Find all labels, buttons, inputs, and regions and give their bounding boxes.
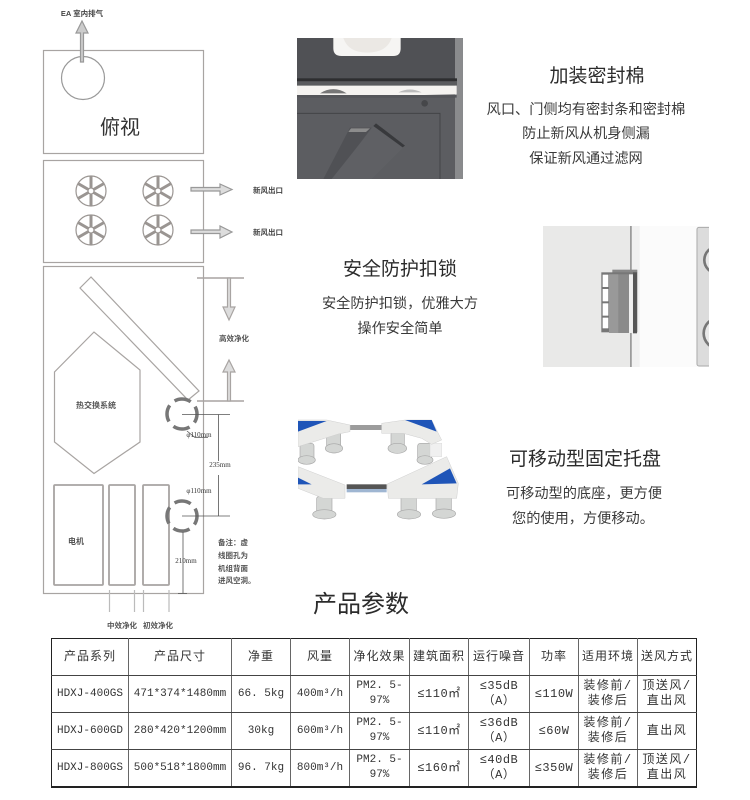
- table: product parameters: 400m³/h: [297, 688, 343, 700]
- note: 备注：虚: [218, 537, 248, 547]
- table: product parameters: HDXJ-400GS: [57, 688, 123, 700]
- text: sealing cotton description: [487, 102, 685, 167]
- label: 210mm: 210mm: [175, 557, 197, 565]
- table: product parameters: 280*420*1200mm: [134, 724, 226, 736]
- table: product parameters: 功率: [541, 650, 567, 664]
- note: 进风空洞。: [218, 575, 256, 585]
- icon: fan top right: [143, 176, 173, 206]
- table: product parameters: HDXJ-600GD: [57, 724, 123, 736]
- feet: [298, 432, 456, 519]
- table: product parameters: 97%: [370, 732, 389, 744]
- arrow: indoor exhaust: [76, 21, 88, 62]
- bars: [350, 425, 382, 430]
- table: product parameters: ≤40dB: [480, 753, 518, 767]
- photo: sealing cotton: [297, 38, 463, 179]
- heading: sealing cotton: 加装密封棉: [549, 66, 645, 87]
- label: medium filtration: 中效净化: [107, 620, 137, 630]
- table: product parameters: PM2. 5-: [356, 754, 403, 766]
- table: product parameters: 97%: [370, 769, 389, 781]
- dashed opening upper: [167, 399, 197, 429]
- photo: movable tray: [298, 419, 460, 522]
- table: product parameters: 直出风: [647, 768, 687, 782]
- text: safety lock description: 安全防护扣锁，优雅大方: [322, 296, 478, 312]
- icon: fan bottom left: [76, 215, 106, 245]
- high-efficiency bracket and arrows: [197, 278, 244, 401]
- label: heat exchange system: 热交换系统: [76, 400, 116, 410]
- box: primary filter: [143, 485, 169, 585]
- table: product parameters: 500*518*1800mm: [134, 762, 226, 774]
- table: product parameters: 送风方式: [641, 650, 693, 664]
- table: product parameters: 30kg: [248, 724, 274, 736]
- blue corners: [298, 420, 457, 484]
- note: [218, 537, 256, 585]
- note: 机组背面: [218, 563, 248, 573]
- text: safety lock description: 操作安全简单: [357, 321, 443, 337]
- dimension lines: [178, 414, 230, 594]
- table: product parameters: 建筑面积: [413, 650, 465, 664]
- table: product parameters: HDXJ-800GS: [57, 762, 123, 774]
- table: product parameters: ≤110W: [535, 686, 573, 700]
- text: safety lock description: [322, 296, 478, 337]
- text: sealing cotton description: 保证新风通过滤网: [529, 151, 643, 167]
- table: product parameters: （A）: [483, 731, 515, 745]
- heading: safety lock: 安全防护扣锁: [343, 259, 457, 280]
- heat exchange system: [54, 332, 140, 474]
- table: product parameters: 直出风: [647, 694, 687, 708]
- label: primary filtration: 初效净化: [143, 620, 173, 630]
- arrow: fresh air outlet 2: [191, 226, 232, 238]
- table: product parameters: 产品系列: [64, 650, 116, 664]
- label: motor: 电机: [68, 536, 84, 546]
- note: 线圈孔为: [218, 550, 248, 560]
- arms: [298, 420, 458, 498]
- dashed opening lower: [167, 501, 197, 531]
- table: product parameters: ≤110㎡: [417, 724, 461, 738]
- table: product parameters: 运行噪音: [473, 650, 525, 664]
- icon: fan bottom right: [143, 215, 173, 245]
- table: product parameters: 471*374*1480mm: [134, 688, 226, 700]
- table: product parameters: 直出风: [647, 724, 687, 738]
- diagram: unit structure views: [42, 9, 709, 629]
- table: product parameters: ≤36dB: [480, 716, 518, 730]
- table: product parameters: PM2. 5-: [356, 717, 403, 729]
- table: product parameters: 净化效果: [353, 650, 406, 664]
- table: product parameters: 97%: [370, 695, 389, 707]
- table: product parameters: 66. 5kg: [238, 688, 284, 700]
- text: sealing cotton description: 防止新风从机身侧漏: [522, 126, 650, 142]
- table: product parameters: 顶送风/: [642, 753, 692, 767]
- table: product parameters: 产品尺寸: [154, 650, 206, 664]
- text: movable tray description: [506, 486, 662, 527]
- table: product parameters: ≤160㎡: [417, 760, 461, 774]
- table: product parameters: 96. 7kg: [238, 762, 284, 774]
- table: product parameters: 顶送风/: [642, 679, 692, 693]
- table: product parameters: ≤35dB: [480, 679, 518, 693]
- text: movable tray description: 可移动型的底座，更方便: [506, 486, 662, 502]
- table: product parameters: 装修前/: [583, 753, 633, 767]
- table: product parameters: 风量: [307, 650, 333, 664]
- table: product parameters: （A）: [483, 768, 515, 782]
- table: product parameters: PM2. 5-: [356, 680, 403, 692]
- label: fresh air outlet 1: 新风出口: [253, 185, 283, 195]
- box: motor: [54, 485, 103, 585]
- table: product parameters: 600m³/h: [297, 724, 343, 736]
- photo: safety lock: [543, 226, 709, 367]
- text: movable tray description: 您的使用，方便移动。: [512, 511, 654, 527]
- arrow: fresh air outlet 1: [191, 184, 232, 195]
- label: high-efficiency filtration: 高效净化: [219, 333, 249, 343]
- high efficiency filter: [80, 277, 199, 400]
- icon: fan top left: [76, 176, 106, 206]
- label: 235mm: 235mm: [209, 461, 231, 469]
- box: medium filter: [109, 485, 135, 585]
- label: EA exhaust: EA 室内排气: [61, 8, 104, 18]
- table: product parameters: 装修前/: [583, 679, 633, 693]
- label: fresh air outlet 2: 新风出口: [253, 227, 283, 237]
- heading: movable tray: 可移动型固定托盘: [509, 449, 661, 470]
- table: product parameters: ≤350W: [535, 760, 573, 774]
- table: product parameters: 装修后: [588, 768, 628, 782]
- text: sealing cotton description: 风口、门侧均有密封条和密封棉: [487, 102, 685, 118]
- panel: fan outlets view: [44, 160, 283, 262]
- table: product parameters: 净重: [248, 650, 274, 664]
- table: product parameters: 装修后: [588, 731, 628, 745]
- table: product parameters: [51, 638, 697, 788]
- panel: front interior view: [44, 266, 256, 630]
- panel: top view: [44, 8, 204, 154]
- filter leader lines: [110, 590, 169, 612]
- heading: product parameters: 产品参数: [313, 591, 409, 618]
- table: product parameters: 装修前/: [583, 716, 633, 730]
- table: product parameters: ≤110㎡: [417, 686, 461, 700]
- table: product parameters: 装修后: [588, 694, 628, 708]
- table: product parameters: 适用环境: [582, 650, 634, 664]
- table: product parameters: ≤60W: [539, 724, 569, 738]
- label: diameter lower: φ110mm: [186, 487, 212, 495]
- table: product parameters: （A）: [483, 694, 515, 708]
- heading: top view: 俯视: [100, 116, 140, 139]
- label: diameter upper: φ110mm: [186, 431, 212, 439]
- table: product parameters: 800m³/h: [297, 762, 343, 774]
